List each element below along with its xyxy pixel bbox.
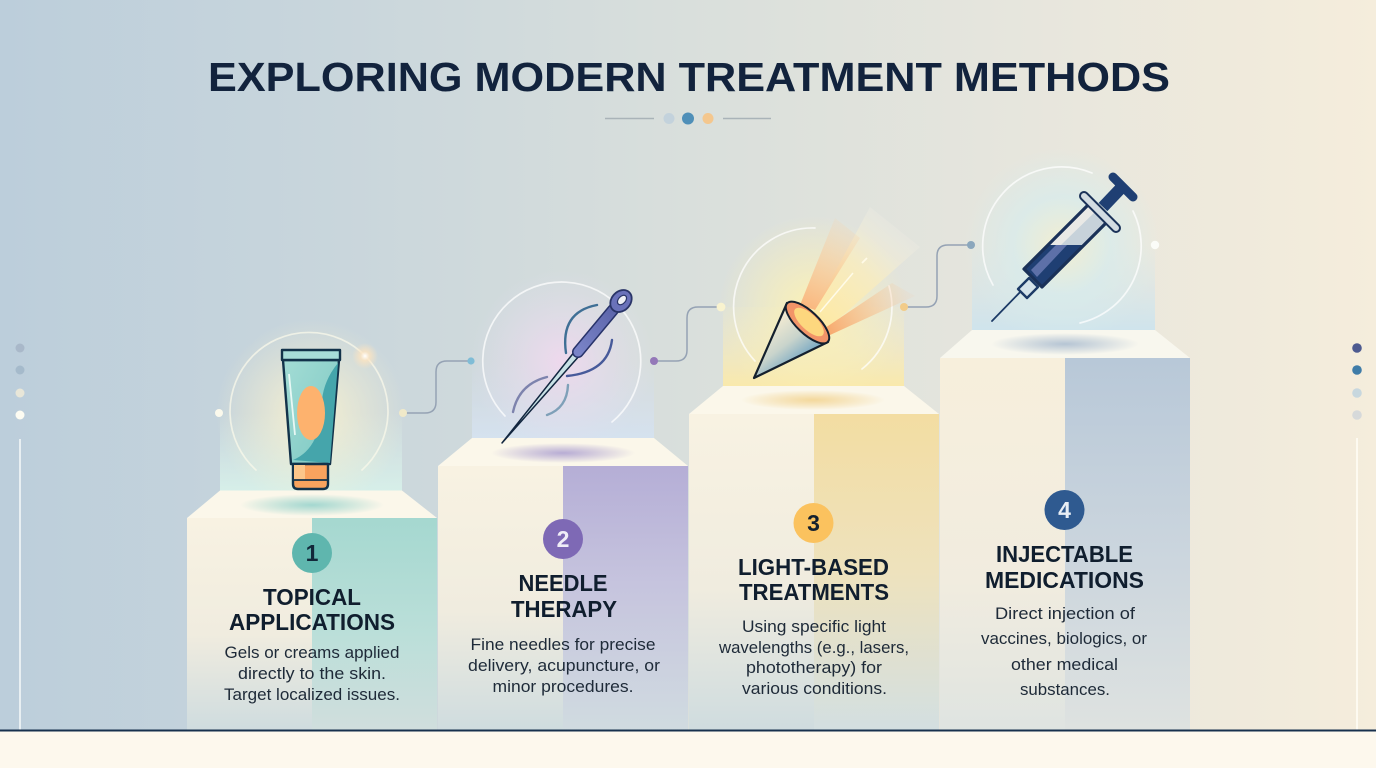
platform 3	[689, 386, 939, 730]
description 4	[981, 604, 1147, 699]
description 2	[468, 635, 660, 696]
icon: syringe	[992, 177, 1133, 321]
description 1: Gels or creams applied	[224, 643, 400, 662]
left side decoration	[16, 344, 24, 730]
right side decoration	[1352, 343, 1362, 730]
description 3: phototherapy) for	[746, 658, 882, 677]
description 3	[718, 617, 909, 698]
description 4: other medical	[1011, 655, 1118, 674]
description 4: substances.	[1020, 680, 1110, 699]
icon: light cone	[754, 207, 920, 378]
glow panel 1	[215, 319, 407, 509]
glow panel 3	[717, 215, 908, 405]
description 4: Direct injection of	[995, 604, 1135, 623]
description 2: delivery, acupuncture, or	[468, 656, 660, 675]
heading 3: LIGHT-BASED	[738, 554, 889, 580]
heading 4	[985, 541, 1144, 593]
description 2: Fine needles for precise	[470, 635, 656, 654]
footer band	[0, 730, 1376, 768]
heading 1	[229, 584, 395, 635]
heading 3: TREATMENTS	[739, 579, 889, 605]
glow panel 2	[467, 269, 658, 453]
heading 4: INJECTABLE	[996, 541, 1133, 567]
title: EXPLORING MODERN TREATMENT METHODS	[208, 54, 1170, 100]
platform 2	[438, 438, 688, 730]
heading 4: MEDICATIONS	[985, 567, 1144, 593]
platform 1	[187, 490, 437, 730]
badge 1	[292, 533, 332, 573]
badge 2	[543, 519, 583, 559]
title divider with dots	[605, 112, 771, 124]
description 1: Target localized issues.	[224, 685, 400, 704]
heading 2	[511, 570, 617, 622]
badge 3: 3	[807, 510, 820, 536]
heading 2: THERAPY	[511, 596, 617, 622]
connector 3 to 4	[904, 245, 971, 307]
description 1: directly to the skin.	[238, 664, 386, 683]
description 4: vaccines, biologics, or	[981, 629, 1147, 648]
glow panel 4	[964, 148, 1160, 344]
platform 4	[940, 330, 1190, 730]
description 3: Using specific light	[742, 617, 886, 636]
badge 4	[1044, 490, 1084, 530]
step 1: topical applications	[187, 319, 437, 730]
description 2: minor procedures.	[492, 677, 634, 696]
connector 1 to 2	[403, 361, 471, 413]
badge 3	[794, 503, 834, 543]
badge 1: 1	[306, 540, 319, 566]
step 2: needle therapy	[438, 269, 688, 730]
description 3: various conditions.	[742, 679, 887, 698]
heading 2: NEEDLE	[518, 570, 608, 596]
icon: needle	[502, 286, 636, 443]
step 4: injectable medications	[940, 148, 1190, 730]
description 3: wavelengths (e.g., lasers,	[718, 638, 909, 657]
badge 2: 2	[557, 526, 569, 552]
connector 2 to 3	[654, 307, 721, 361]
heading 1: TOPICAL	[263, 584, 361, 610]
description 1	[224, 643, 400, 704]
heading 1: APPLICATIONS	[229, 609, 395, 635]
badge 4: 4	[1058, 497, 1071, 523]
step 3: light-based treatments	[689, 207, 939, 730]
heading 3	[738, 554, 889, 605]
icon: cream tube	[282, 343, 378, 489]
